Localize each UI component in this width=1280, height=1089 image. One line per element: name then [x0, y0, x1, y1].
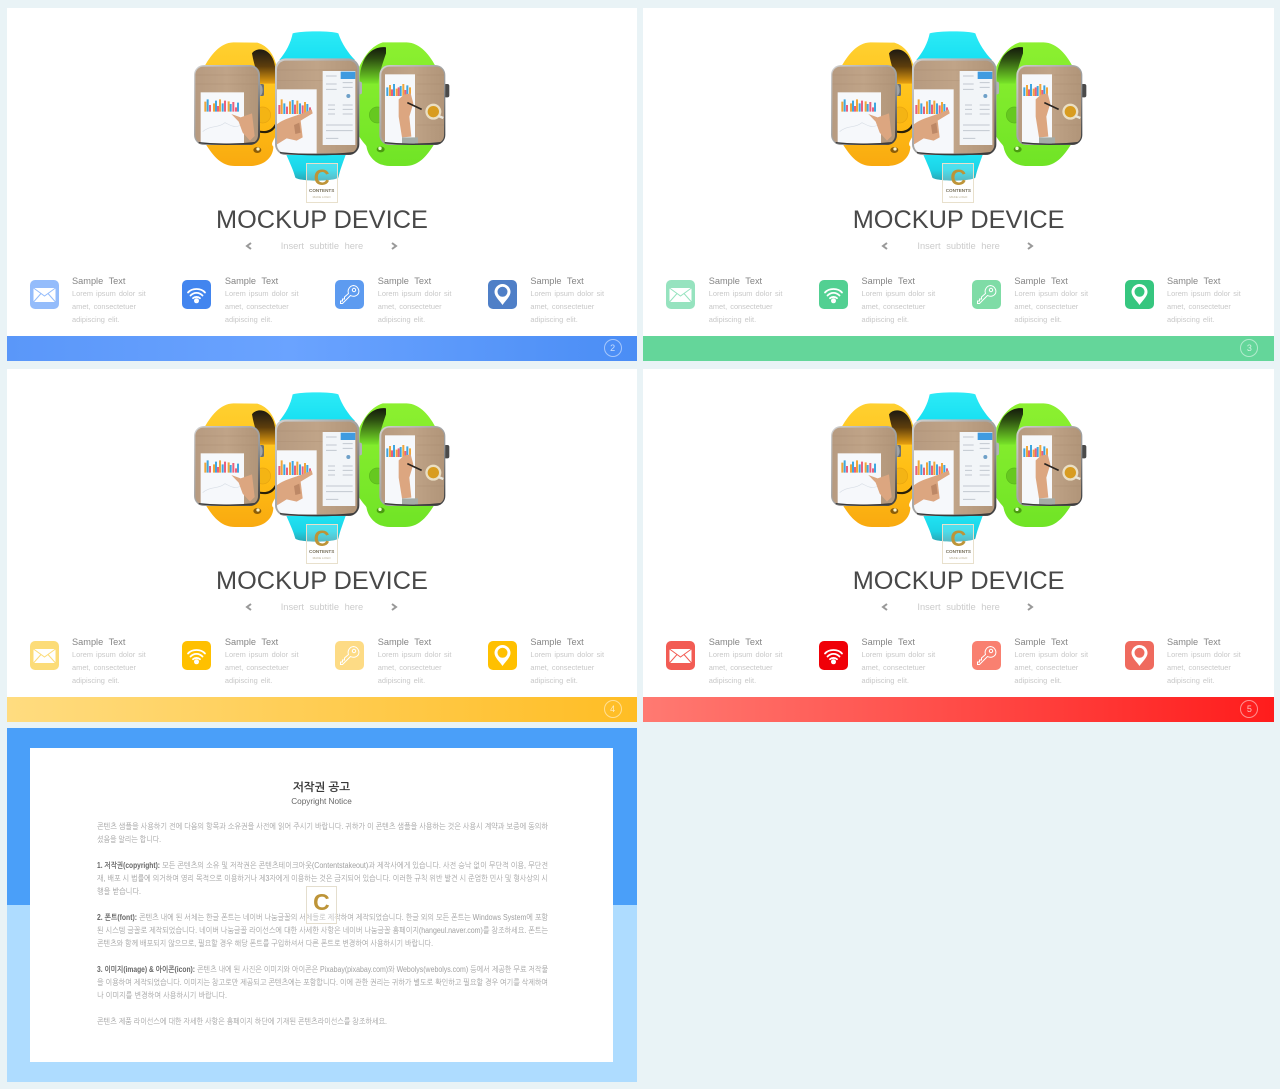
icon: envelope — [30, 641, 59, 670]
feature text: amet, consectetuer — [1167, 302, 1231, 311]
feature: wifi — [182, 637, 298, 685]
section 2 font: 콘텐츠 내에 된 서체는 한글 폰트는 네이버 나눔글꼴의 서체들로 제작하여 제작되었습니다. 한글 외의 모든 폰트는 Windows System에 포함 — [139, 913, 548, 922]
feature text: amet, consectetuer — [72, 663, 136, 672]
icon: envelope — [666, 280, 695, 309]
footer bar with page number — [643, 336, 1274, 361]
feature text: Sample Text — [1014, 276, 1068, 286]
feature text: adipiscing elit. — [1167, 315, 1214, 324]
watermark logo — [942, 524, 974, 564]
feature: key — [972, 276, 1088, 324]
feature: wifi — [819, 276, 936, 324]
icon: envelope — [30, 280, 59, 309]
feature text: amet, consectetuer — [225, 663, 289, 672]
icon: right chevron — [392, 603, 398, 611]
watermark logo — [942, 163, 974, 203]
feature text — [378, 637, 452, 685]
feature text — [378, 276, 452, 324]
icon: map pin — [488, 280, 517, 309]
feature text: Lorem ipsum dolor sit — [1167, 289, 1241, 298]
icon: right chevron — [1028, 242, 1034, 250]
icon: key — [972, 641, 1001, 670]
watermark logo: C — [950, 526, 966, 551]
section 1 copyright: 모든 콘텐츠의 소유 및 저작권은 콘텐츠테이크아웃(Contentstakeout)과 제작사에게 있습니다. 사전 승낙 없이 무단적 이용, 무단전 — [162, 861, 548, 870]
feature text: amet, consectetuer — [378, 663, 442, 672]
feature text: Lorem ipsum dolor sit — [862, 289, 935, 298]
feature text — [530, 637, 604, 685]
icon: wifi — [819, 641, 848, 670]
footer bar with page number: 3 — [1247, 343, 1252, 353]
feature text: adipiscing elit. — [1014, 676, 1062, 685]
feature: key — [335, 637, 452, 685]
feature text: Lorem ipsum dolor sit — [378, 650, 451, 659]
feature text: amet, consectetuer — [709, 302, 773, 311]
section 1 copyright: 재, 배포 시 법률에 의거하여 영리 목적으로 이용하거나 제3자에게 이용하는 것은 금지되어 있습니다. 이러한 규칙 위반 발견 시 준엄한 민사 및 형사상의 시 — [97, 874, 548, 883]
icon: wifi — [819, 280, 848, 309]
feature text: Lorem ipsum dolor sit — [72, 650, 146, 659]
icon: left chevron — [882, 603, 888, 611]
feature text — [1167, 636, 1259, 694]
feature text: Lorem ipsum dolor sit — [72, 289, 146, 298]
subtitle: Insert subtitle here — [917, 241, 1000, 251]
watermark logo: CONTENTS — [309, 188, 334, 193]
icon: wifi — [182, 641, 211, 670]
panel: green slide — [643, 8, 1274, 361]
panel: copyright notice — [7, 728, 637, 1082]
feature text: adipiscing elit. — [709, 315, 756, 324]
feature text: adipiscing elit. — [1167, 676, 1214, 685]
feature text: Lorem ipsum dolor sit — [1167, 650, 1241, 659]
feature text: amet, consectetuer — [225, 302, 289, 311]
feature text — [1014, 276, 1088, 324]
feature text — [225, 276, 298, 324]
feature text: amet, consectetuer — [378, 302, 442, 311]
panel: blue slide — [7, 8, 637, 361]
feature: location — [1125, 276, 1241, 324]
icon: left chevron — [246, 242, 252, 250]
feature text: Sample Text — [378, 637, 431, 647]
feature text: adipiscing elit. — [72, 315, 119, 324]
feature text — [1014, 636, 1106, 694]
feature text: amet, consectetuer — [72, 302, 136, 311]
feature text: amet, consectetuer — [1014, 663, 1078, 672]
feature text: Sample Text — [1014, 637, 1068, 647]
feature text: Sample Text — [530, 637, 584, 647]
icon: left chevron — [882, 242, 888, 250]
footer bar with page number: 4 — [610, 704, 615, 714]
icon: key — [335, 280, 364, 309]
section 3 image and icon: 나 이미지를 변경하여 사용하시기 바랍니다. — [97, 991, 227, 1000]
feature text: Lorem ipsum dolor sit — [530, 289, 604, 298]
feature text: amet, consectetuer — [709, 663, 773, 672]
feature: mail — [666, 276, 782, 324]
copyright text — [30, 748, 613, 1062]
feature text: adipiscing elit. — [225, 676, 272, 685]
feature: key — [972, 636, 1107, 694]
subtitle: Insert subtitle here — [917, 602, 1000, 612]
watch mockup image — [831, 31, 1086, 181]
section 1 copyright — [97, 861, 548, 896]
feature text: Sample Text — [530, 276, 584, 286]
feature text: Sample Text — [1167, 637, 1220, 647]
watermark logo: C — [313, 889, 330, 915]
section 3 image and icon: 3. 이미지(image) & 아이콘(icon): — [97, 965, 195, 974]
section 3 image and icon — [97, 965, 548, 1000]
feature text: Sample Text — [378, 276, 431, 286]
feature text: Lorem ipsum dolor sit — [1014, 650, 1088, 659]
watermark logo: C — [950, 165, 966, 190]
feature text: adipiscing elit. — [1014, 315, 1062, 324]
feature text: adipiscing elit. — [225, 315, 272, 324]
feature text — [72, 276, 146, 324]
section 2 font: 된 시스템 글꼴로 제작되었습니다. 네이버 나눔글꼴 라이선스에 대한 사세한 사항은 네이버 나눔글꼴 홈페이지(hangeul.naver.com)를 참조하세요. 폰트는 — [97, 926, 548, 935]
feature text: Sample Text — [862, 276, 915, 286]
footer bar with page number: 2 — [610, 343, 615, 353]
icon: key — [972, 280, 1001, 309]
section 1 copyright: 1. 저작권(copyright): — [97, 861, 160, 870]
feature text: amet, consectetuer — [530, 663, 594, 672]
section 3 image and icon: 콘텐츠 내에 된 사진은 이미지와 아이콘은 Pixabay(pixabay.com)와 Webolys(webolys.com) 등에서 제공한 무료 저작물 — [197, 965, 548, 974]
feature text — [1167, 276, 1241, 324]
feature text: Sample Text — [225, 637, 278, 647]
feature: mail — [30, 276, 146, 324]
watermark logo: MAKE LOGO — [313, 556, 331, 560]
feature text: adipiscing elit. — [378, 315, 425, 324]
section 2 font: 2. 폰트(font): — [97, 913, 137, 922]
feature text: amet, consectetuer — [862, 302, 925, 311]
intro paragraph — [97, 822, 548, 844]
icon: map pin — [1125, 280, 1154, 309]
watermark logo — [306, 524, 338, 564]
feature text: Lorem ipsum dolor sit — [225, 289, 298, 298]
watch mockup image — [194, 31, 450, 181]
feature text: Sample Text — [72, 276, 125, 286]
watch mockup image — [194, 392, 450, 542]
footer bar with page number: 5 — [1247, 704, 1252, 714]
watermark logo: CONTENTS — [946, 549, 971, 554]
icon: map pin — [1125, 641, 1154, 670]
heading: MOCKUP DEVICE — [216, 567, 428, 595]
feature text: Lorem ipsum dolor sit — [530, 650, 604, 659]
icon: map pin — [488, 641, 517, 670]
watermark logo: CONTENTS — [946, 188, 971, 193]
notice heading: 저작권 공고 — [293, 781, 350, 794]
feature text — [709, 276, 782, 324]
feature text: adipiscing elit. — [862, 315, 909, 324]
icon: right chevron — [1028, 603, 1034, 611]
subtitle: Insert subtitle here — [281, 241, 363, 251]
intro paragraph: 셨음을 알리는 합니다. — [97, 835, 161, 844]
feature text — [862, 637, 936, 685]
intro paragraph: 콘텐츠 샘플을 사용하기 전에 다음의 항목과 소유권을 사전에 읽어 주시기 바랍니다. 귀하가 이 콘텐츠 샘플을 사용하는 것은 사용시 계약과 보증에 동의하 — [97, 822, 548, 831]
icon: right chevron — [392, 242, 398, 250]
footer bar with page number — [643, 697, 1274, 722]
heading: MOCKUP DEVICE — [853, 206, 1065, 234]
feature text: Sample Text — [709, 276, 762, 286]
section 2 font — [97, 913, 548, 948]
feature text: adipiscing elit. — [709, 676, 756, 685]
watermark logo: CONTENTS — [309, 549, 334, 554]
feature text: Lorem ipsum dolor sit — [709, 289, 782, 298]
feature text: adipiscing elit. — [530, 315, 578, 324]
watermark logo: C — [314, 526, 330, 551]
watch mockup image — [831, 392, 1086, 542]
section 1 copyright: 행을 받습니다. — [97, 887, 141, 896]
feature: wifi — [182, 276, 298, 324]
icon: key — [335, 641, 364, 670]
panel: red slide — [643, 369, 1274, 722]
feature text: amet, consectetuer — [530, 302, 594, 311]
feature text — [862, 276, 936, 324]
watermark logo: MAKE LOGO — [949, 195, 967, 199]
feature: wifi — [819, 637, 936, 685]
feature text: Sample Text — [72, 637, 125, 647]
feature text: Sample Text — [225, 276, 278, 286]
section 2 font: 콘텐츠와 함께 배포되지 않으므로, 필요할 경우 해당 폰트를 구입하셔서 다른 폰트로 변경하여 사용하시기 바랍니다. — [97, 939, 433, 948]
feature text: Lorem ipsum dolor sit — [378, 289, 451, 298]
feature text: Lorem ipsum dolor sit — [862, 650, 935, 659]
icon: envelope — [666, 641, 695, 670]
watermark logo: MAKE LOGO — [949, 556, 967, 560]
watermark logo: C — [314, 165, 330, 190]
icon: left chevron — [246, 603, 252, 611]
feature: location — [1125, 636, 1260, 694]
footer bar with page number — [7, 697, 637, 722]
feature text: Sample Text — [709, 637, 762, 647]
feature text — [72, 637, 146, 685]
footer bar with page number — [7, 336, 637, 361]
feature text: amet, consectetuer — [862, 663, 925, 672]
feature text: amet, consectetuer — [1014, 302, 1078, 311]
feature text: Lorem ipsum dolor sit — [225, 650, 298, 659]
feature text: adipiscing elit. — [862, 676, 909, 685]
feature text: Lorem ipsum dolor sit — [709, 650, 782, 659]
feature text: Lorem ipsum dolor sit — [1014, 289, 1088, 298]
feature text — [225, 637, 298, 685]
closing line: 콘텐츠 제품 라이선스에 대한 자세한 사항은 홈페이지 하단에 기재된 콘텐츠라이선스를 참조하세요. — [97, 1017, 387, 1026]
feature: mail — [30, 637, 146, 685]
feature text — [709, 637, 782, 685]
feature: location — [488, 637, 604, 685]
notice subheading: Copyright Notice — [291, 797, 352, 806]
heading: MOCKUP DEVICE — [853, 567, 1065, 595]
watermark logo: MAKE LOGO — [313, 195, 331, 199]
section 3 image and icon: 을 이용하여 제작되었습니다. 이미지는 참고로만 제공되고 콘텐츠에는 포함합니다. 이에 관한 권리는 귀하가 별도로 확인하고 필요할 경우 여기를 삭제하여 — [97, 978, 548, 987]
notice sheet — [30, 748, 613, 1062]
feature text: Sample Text — [1167, 276, 1220, 286]
panel: yellow slide — [7, 369, 637, 722]
feature text: adipiscing elit. — [530, 676, 578, 685]
feature text: adipiscing elit. — [378, 676, 425, 685]
icon: wifi — [182, 280, 211, 309]
feature: mail — [666, 637, 782, 685]
watermark logo — [306, 163, 338, 203]
subtitle: Insert subtitle here — [281, 602, 363, 612]
feature: location — [488, 276, 604, 324]
feature text — [530, 276, 604, 324]
watermark logo — [306, 886, 337, 924]
feature text: amet, consectetuer — [1167, 663, 1231, 672]
heading: MOCKUP DEVICE — [216, 206, 428, 234]
feature text: adipiscing elit. — [72, 676, 119, 685]
feature text: Sample Text — [862, 637, 915, 647]
feature: key — [335, 276, 452, 324]
